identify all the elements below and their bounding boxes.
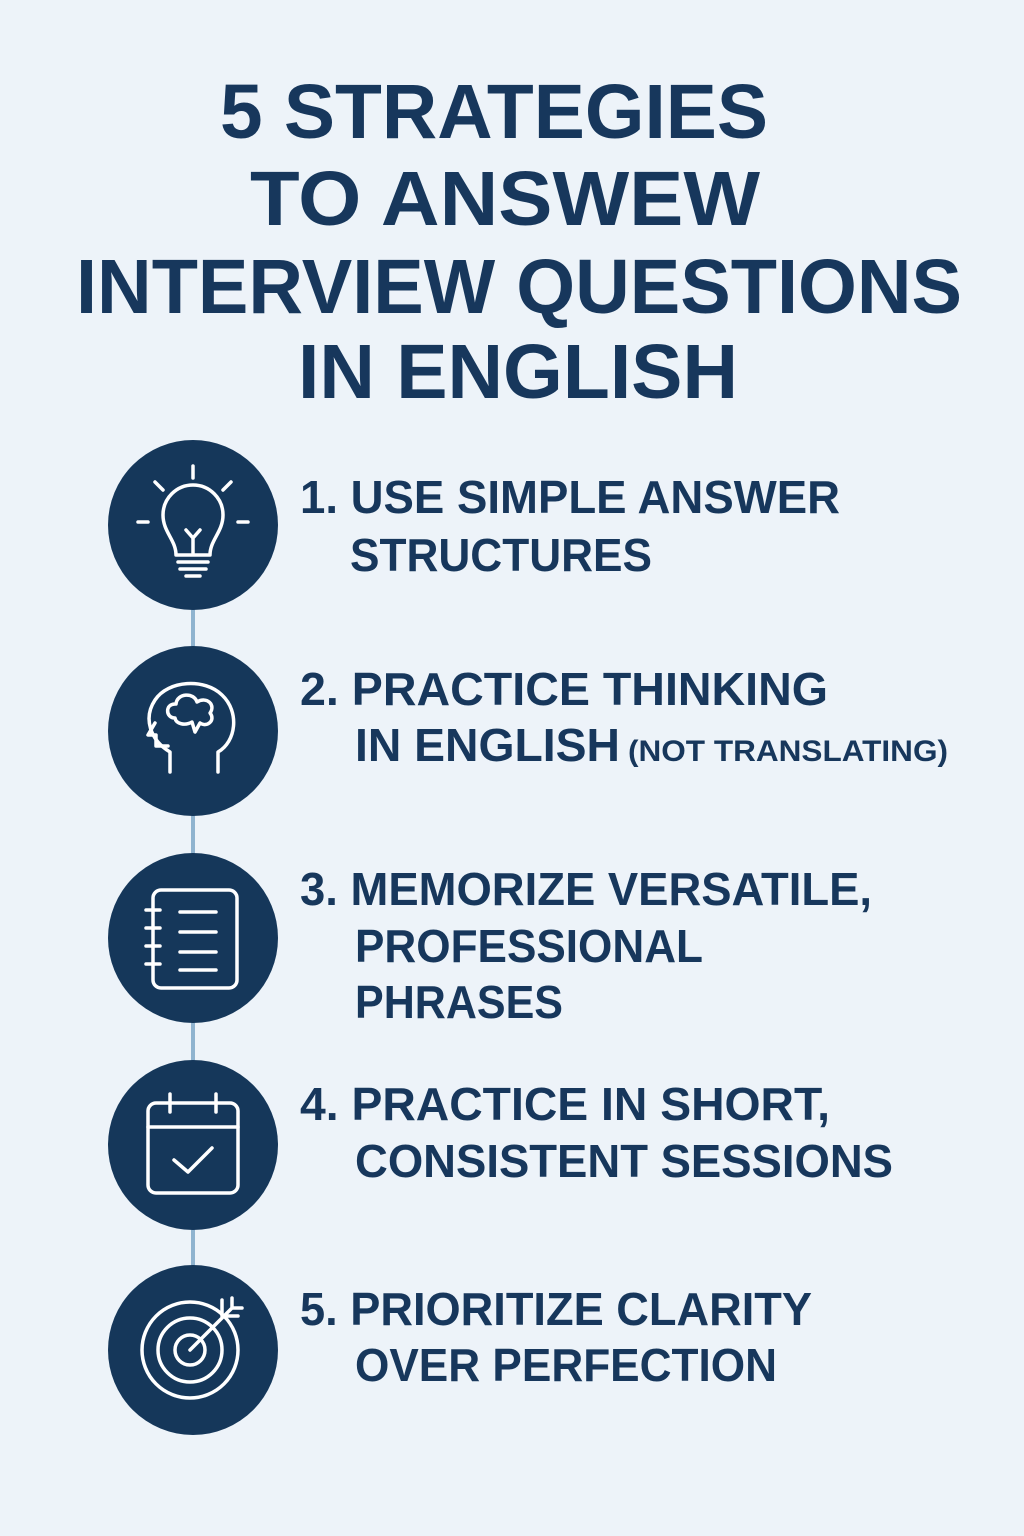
item 5 text: 5. PRIORITIZE CLARITY — [300, 1283, 812, 1335]
icon: notebook — [108, 853, 278, 1023]
connector line — [191, 525, 195, 1350]
item 4 text: 4. PRACTICE IN SHORT, — [300, 1078, 830, 1130]
item 2 text: 2. PRACTICE THINKING — [300, 663, 828, 715]
item 3 text: PHRASES — [355, 976, 563, 1028]
item 3 text: PROFESSIONAL — [355, 920, 703, 972]
item 1 text: STRUCTURES — [350, 529, 652, 581]
item 1 text: 1. USE SIMPLE ANSWER — [300, 471, 840, 523]
title: TO ANSWEW — [250, 156, 760, 242]
item 1 text — [300, 471, 840, 581]
title: IN ENGLISH — [298, 329, 738, 415]
item 2 text — [300, 663, 948, 771]
item 5 text: OVER PERFECTION — [355, 1339, 777, 1391]
item 4 text — [300, 1078, 893, 1187]
icon: head with cloud — [108, 646, 278, 816]
icon: lightbulb — [108, 440, 278, 610]
item 3 text: 3. MEMORIZE VERSATILE, — [300, 863, 872, 915]
icon: target — [108, 1265, 278, 1435]
item 4 text: CONSISTENT SESSIONS — [355, 1135, 893, 1187]
title: 5 STRATEGIES — [220, 69, 768, 155]
item 2 text: (NOT TRANSLATING) — [628, 735, 948, 768]
item 2 text: IN ENGLISH — [355, 719, 620, 771]
item 3 text — [300, 863, 872, 1028]
title — [76, 69, 962, 415]
title: INTERVIEW QUESTIONS — [76, 244, 962, 330]
item 5 text — [300, 1283, 812, 1391]
icon: calendar — [108, 1060, 278, 1230]
